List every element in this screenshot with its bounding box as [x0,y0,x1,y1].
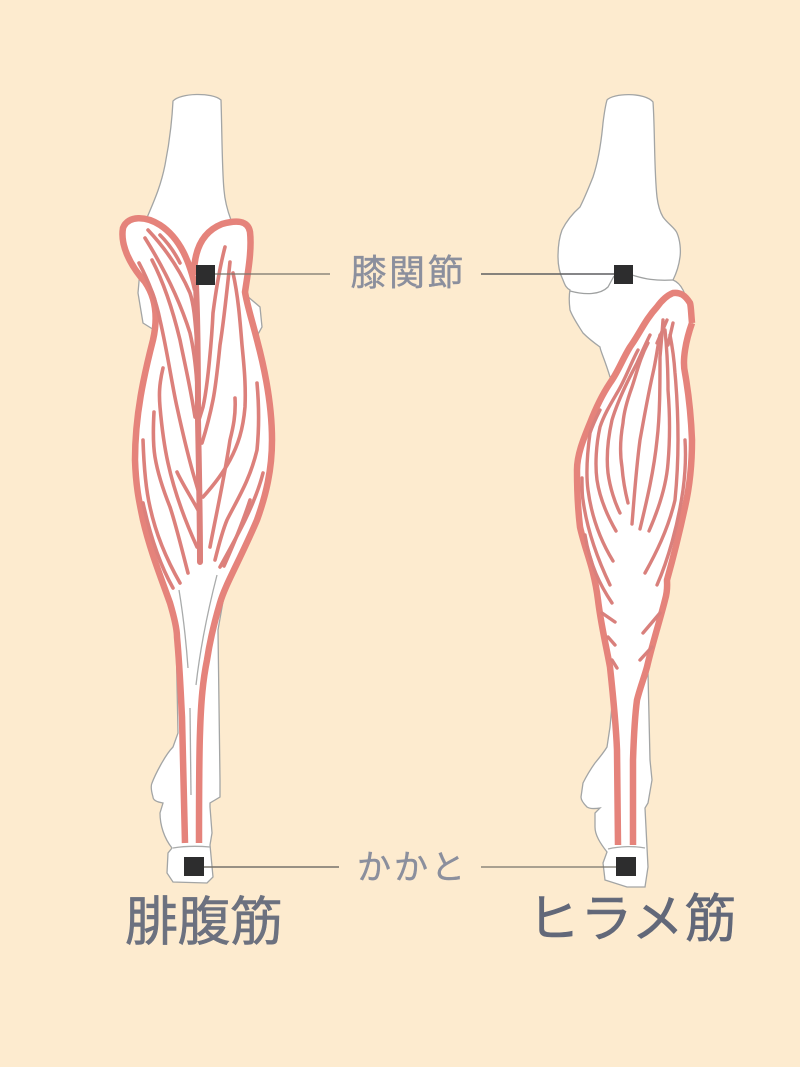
bone: left leg femur, tibia and foot [138,94,262,883]
bone: heel joint line [608,847,645,849]
leader line: left knee [215,273,330,275]
figure: gastrocnemius leg [122,94,272,883]
muscle: gastrocnemius fibers [139,230,263,588]
bone: knee joint line [570,275,673,294]
heading: soleus: ヒラメ筋 [528,891,736,949]
leader line: right knee [481,273,614,275]
muscle: gastrocnemius white body [122,218,272,843]
muscle: gastrocnemius outline [122,218,272,843]
joint marker: heel [616,857,636,876]
figure: soleus leg [558,95,693,887]
muscle: soleus outline [577,293,692,845]
muscle: soleus white body [577,293,692,847]
bone: right leg femur, tibia and foot [558,95,693,887]
heading: gastrocnemius: 腓腹筋 [125,893,283,952]
joint marker: knee [196,265,215,285]
tendon: Achilles center lines [173,575,217,848]
label: knee joint: 膝関節 [350,252,464,293]
joint marker: heel [184,857,204,876]
leader line: left heel [204,866,339,868]
leader line: right heel [481,866,616,868]
label: heel: かかと [357,849,465,887]
joint marker: knee [614,265,633,284]
muscle: soleus fibers [582,320,685,668]
